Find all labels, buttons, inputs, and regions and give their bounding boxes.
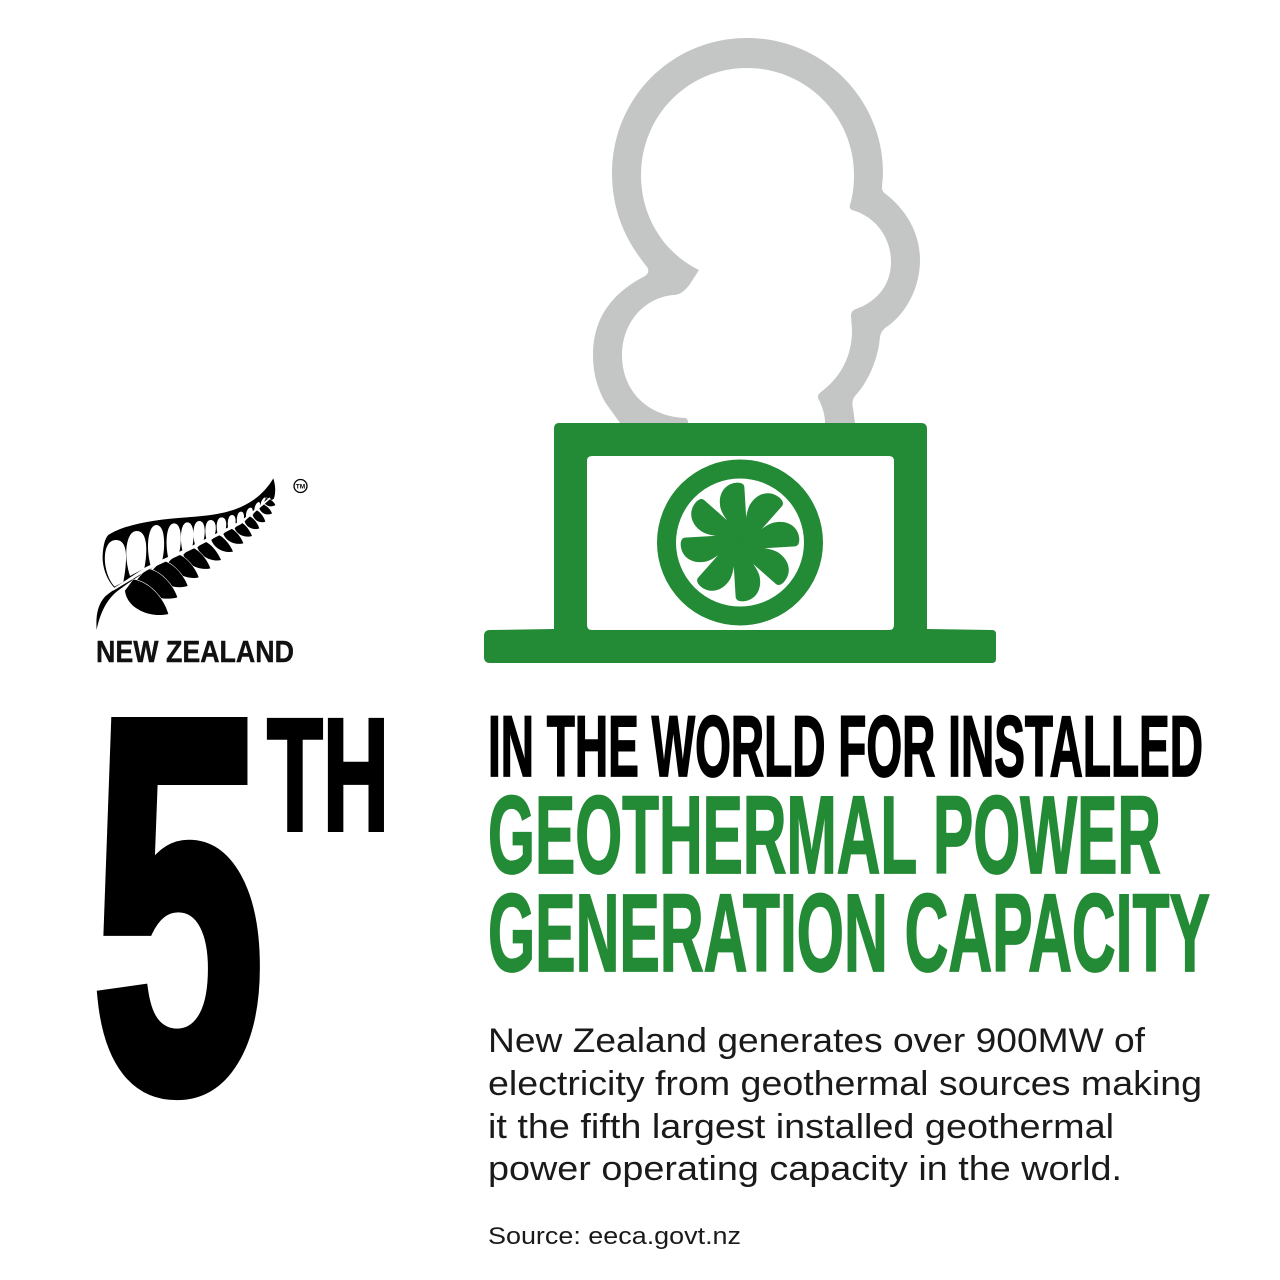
body paragraph: power operating capacity in the world. (488, 1150, 1122, 1188)
body paragraph: electricity from geothermal sources making (488, 1065, 1202, 1103)
icon: grey steam cloud (593, 38, 920, 423)
heading (488, 699, 1210, 995)
turbine ring (666, 469, 814, 616)
icon: geothermal plant building (484, 423, 996, 663)
big rank: 5th (92, 610, 389, 1200)
body paragraph: it the fifth largest installed geothermal (488, 1108, 1114, 1146)
body paragraph: New Zealand generates over 900MW of (488, 1022, 1146, 1060)
logo wordmark: NEW ZEALAND (96, 634, 294, 669)
icon: trademark symbol (294, 480, 307, 492)
turbine blades (681, 483, 799, 601)
icon: turbine fan (666, 469, 814, 616)
fern upper holes (105, 497, 266, 587)
logo: silver fern New Zealand (96, 478, 307, 669)
icon: silver fern (96, 478, 275, 630)
body paragraph (488, 1022, 1202, 1188)
icon: trademark symbol: TM (296, 484, 305, 490)
fern white midrib (110, 497, 271, 591)
plant base (484, 629, 996, 663)
source note: Source: eeca.govt.nz (488, 1223, 741, 1250)
fern lower leaflets (125, 498, 275, 615)
plant walls (554, 423, 927, 632)
superscript TH: TH (267, 685, 389, 864)
numeral 5: 5 (92, 610, 264, 1200)
fern upper body (96, 478, 275, 630)
